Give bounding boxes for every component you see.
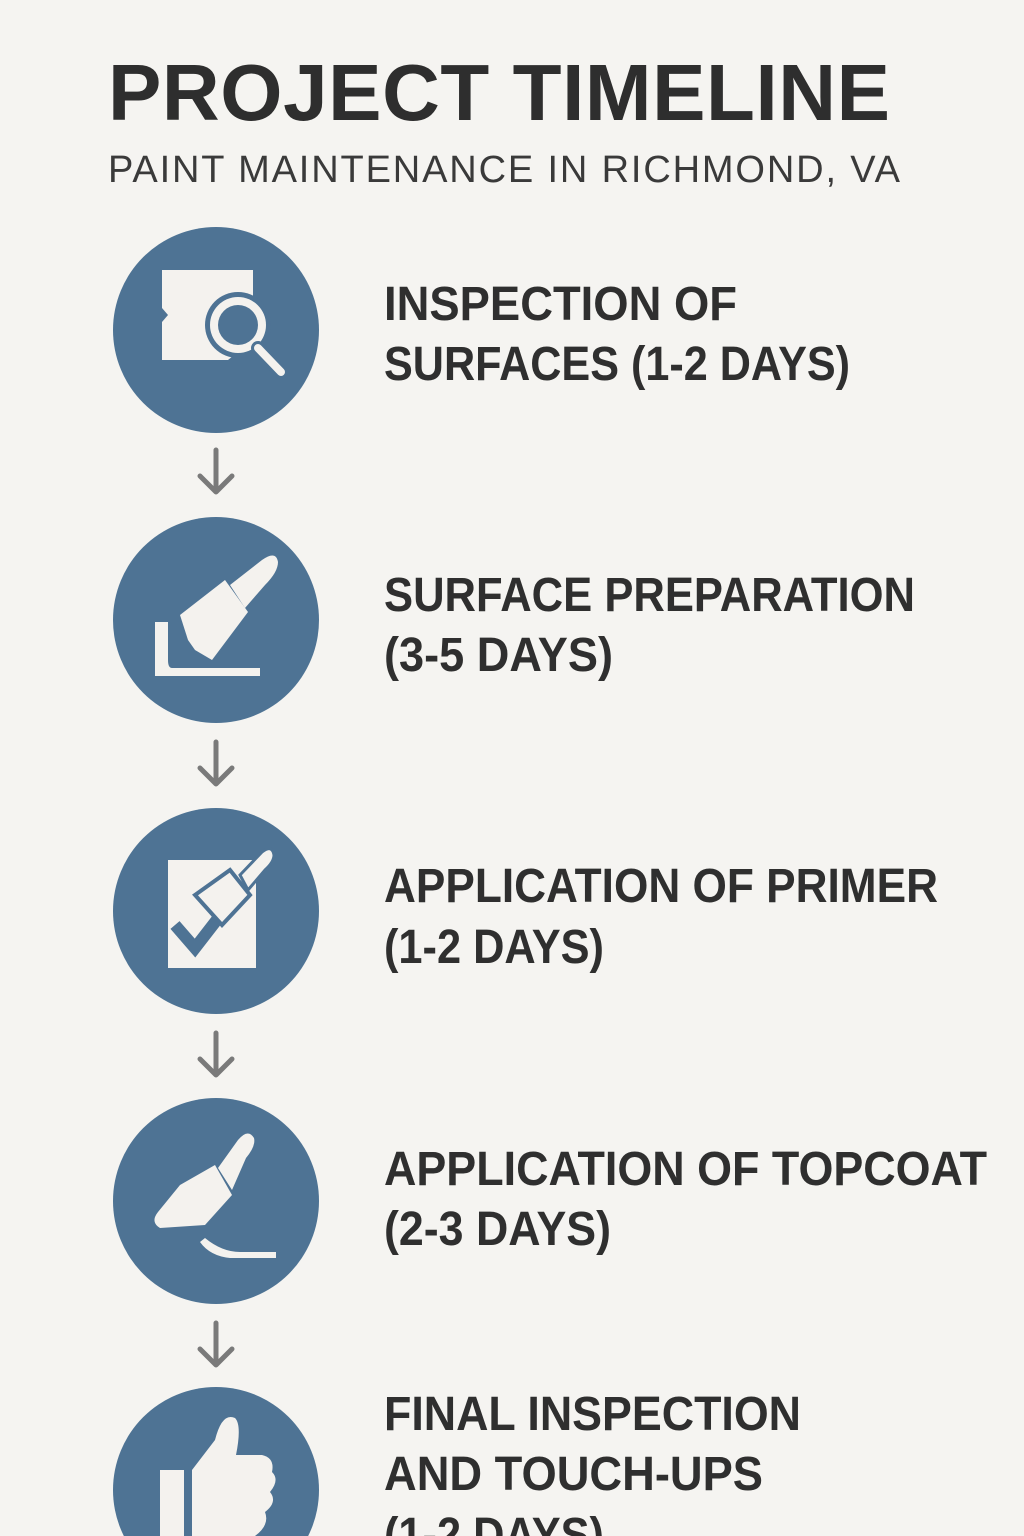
text: step 4: (2-3 DAYS) <box>384 1203 611 1256</box>
icon: paint brush <box>113 1098 319 1304</box>
title: PROJECT TIMELINE <box>108 48 890 137</box>
step 2: preparation <box>113 517 915 723</box>
text: step 3 <box>384 860 938 974</box>
step 5: final inspection <box>113 1387 801 1536</box>
text: step 2: (3-5 DAYS) <box>384 629 613 682</box>
text: step 2 <box>384 569 915 682</box>
text: step 4 <box>384 1143 987 1256</box>
text: step 1: SURFACES (1-2 DAYS) <box>384 338 850 391</box>
subtitle: PAINT MAINTENANCE IN RICHMOND, VA <box>108 149 901 191</box>
step 4: topcoat <box>113 1098 987 1304</box>
arrow 3 <box>200 1033 232 1075</box>
arrow 4 <box>200 1323 232 1365</box>
text: step 5: AND TOUCH-UPS <box>384 1448 763 1501</box>
arrow 1 <box>200 450 232 492</box>
icon: scraper brush <box>113 517 319 723</box>
arrow 2 <box>200 742 232 784</box>
icon: surface with magnifier <box>113 227 319 433</box>
text: step 1 <box>384 278 850 391</box>
step 3: primer <box>113 808 938 1014</box>
text: step 5: FINAL INSPECTION <box>384 1388 801 1441</box>
text: step 5 <box>384 1388 801 1536</box>
text: step 2: SURFACE PREPARATION <box>384 569 915 622</box>
text: step 1: INSPECTION OF <box>384 278 737 331</box>
text: step 3: APPLICATION OF PRIMER <box>384 860 938 913</box>
text: step 3: (1-2 DAYS) <box>384 921 604 974</box>
icon: thumbs up <box>113 1387 319 1536</box>
text: step 4: APPLICATION OF TOPCOAT <box>384 1143 987 1196</box>
icon: checkbox brush <box>113 808 319 1014</box>
step 1: inspection <box>113 227 850 433</box>
